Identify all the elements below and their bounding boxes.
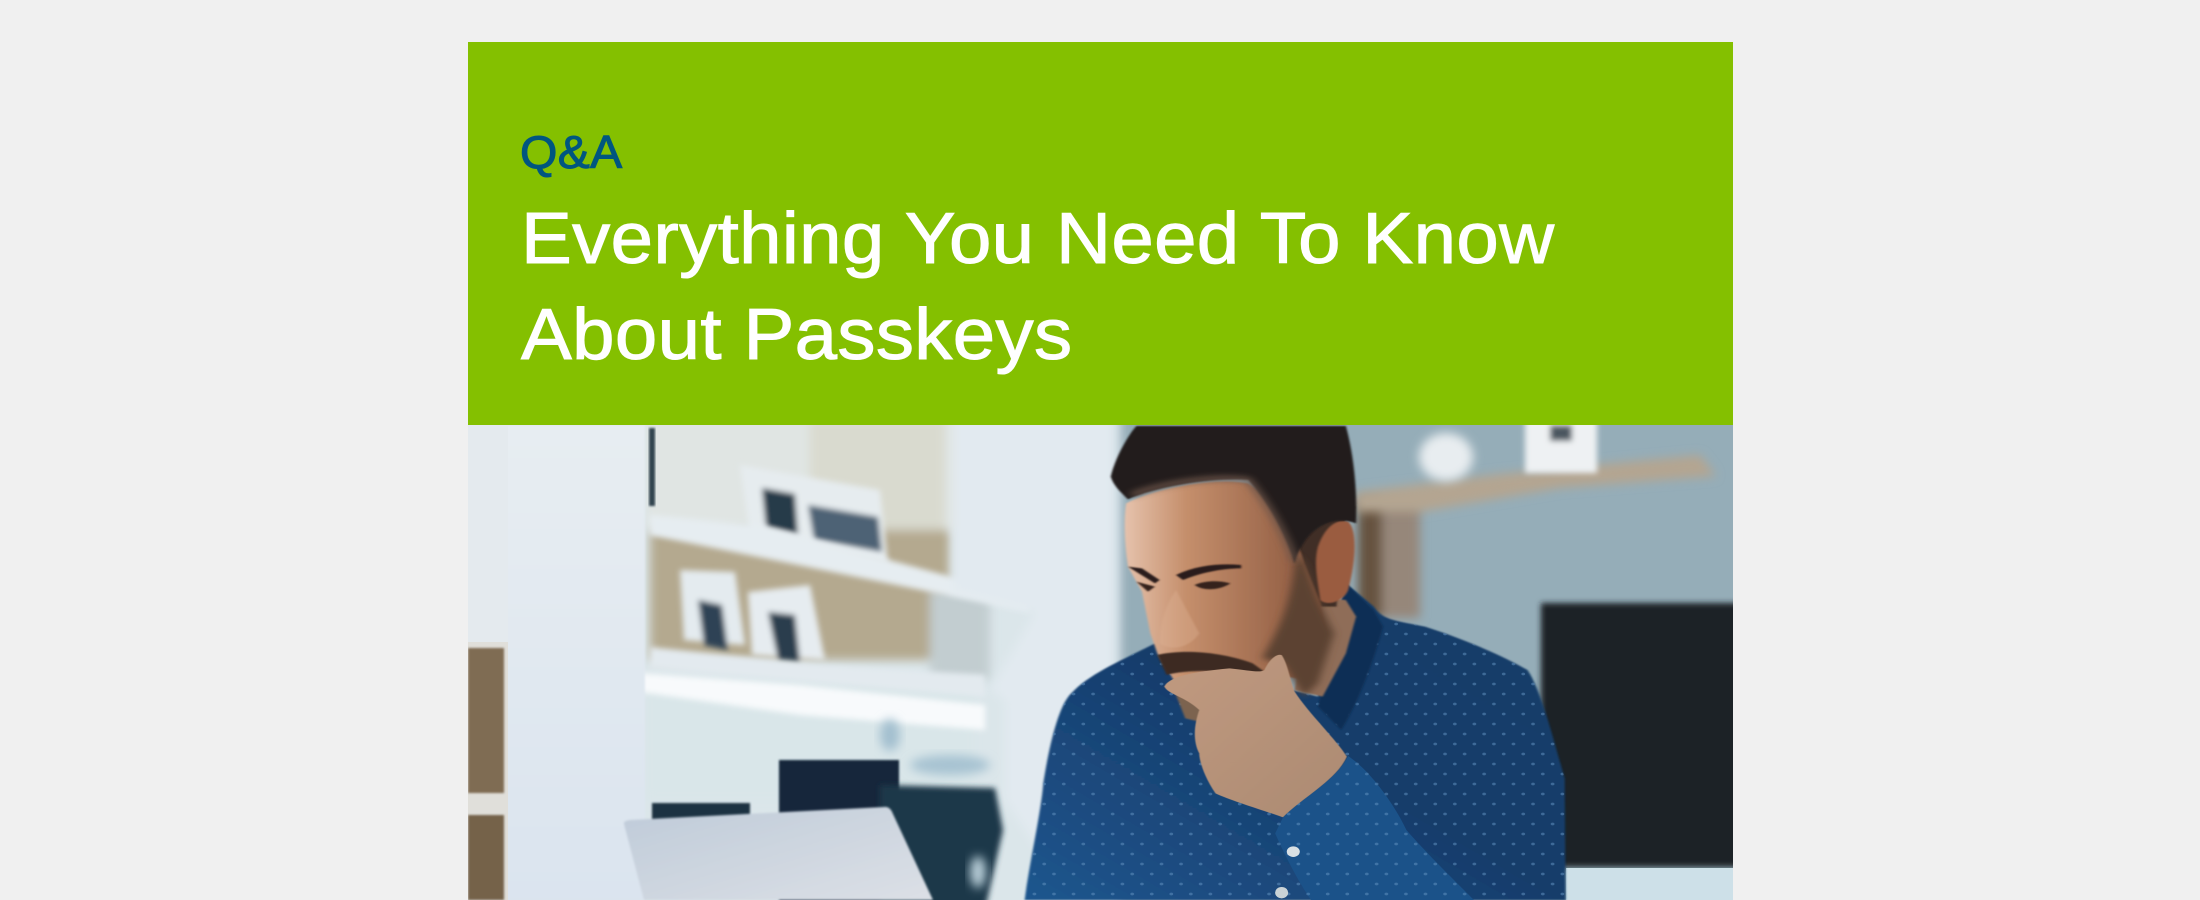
panel: green header — [468, 42, 1733, 425]
beard — [1157, 553, 1334, 722]
shirt — [1025, 583, 1566, 900]
white column centre — [953, 415, 1115, 860]
frames on lower shelf — [680, 570, 825, 662]
wood post — [1358, 500, 1420, 618]
photo: man thinking at a laptop — [468, 425, 1733, 900]
title — [520, 199, 1555, 375]
mug — [1419, 433, 1473, 481]
neck — [1295, 597, 1356, 697]
lit shelf strip — [638, 673, 985, 730]
background: wall shelf and objects — [1355, 415, 1741, 900]
ear — [1316, 521, 1355, 603]
man — [1025, 426, 1566, 900]
background: right wall — [1080, 410, 1750, 900]
dark monitor — [652, 719, 1003, 900]
hand — [1164, 655, 1347, 817]
shelf boards — [650, 515, 1030, 697]
frames on upper shelf — [740, 465, 888, 565]
wooden cabinet — [468, 642, 508, 900]
wood shelf — [1355, 455, 1716, 512]
background: left bookshelf — [638, 415, 1115, 900]
background: white left column — [468, 425, 645, 900]
background: room wall — [468, 425, 1733, 900]
brow and eye — [1128, 564, 1241, 647]
hair — [1111, 426, 1356, 563]
picture frame — [1525, 415, 1597, 473]
sleeve cuff — [1275, 756, 1474, 900]
head and face — [1125, 481, 1355, 680]
title: About Passkeys — [521, 295, 1072, 375]
shelf back — [645, 415, 990, 800]
dark upright — [649, 428, 655, 506]
title: Everything You Need To Know — [521, 199, 1554, 279]
shirt buttons — [1275, 846, 1300, 898]
dark TV — [1541, 603, 1741, 900]
laptop — [624, 807, 933, 900]
kicker: Q&A: Q&A — [520, 126, 622, 178]
